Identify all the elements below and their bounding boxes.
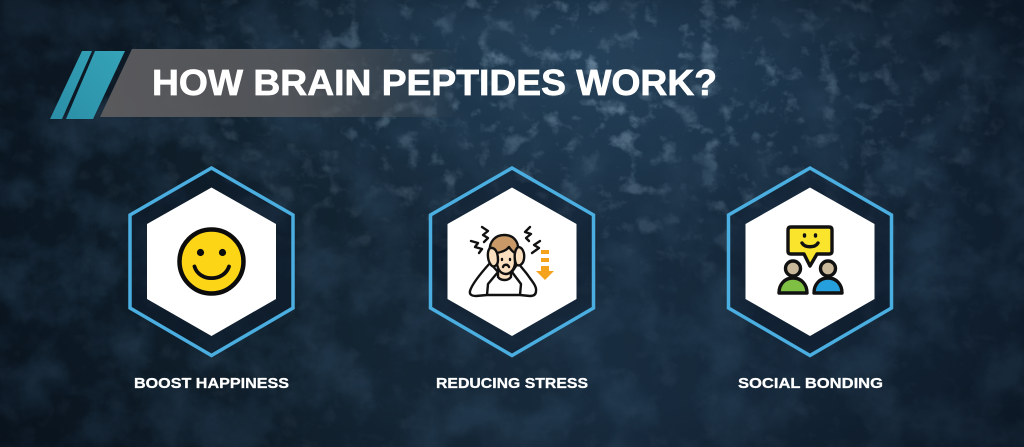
speech bubble [788, 227, 832, 266]
hand left [488, 248, 498, 266]
title: HOW BRAIN PEPTIDES WORK? [152, 62, 717, 103]
panel: boost happiness [130, 168, 293, 392]
label: SOCIAL BONDING [738, 375, 883, 392]
hexagon outline [430, 168, 594, 356]
bubble eyes [804, 235, 816, 236]
arms and torso [470, 263, 536, 296]
icon: stressed person [470, 227, 540, 296]
hair [490, 235, 518, 254]
person left head [786, 261, 800, 276]
icon: two people with speech bubble [779, 227, 842, 293]
panel: social bonding [728, 168, 892, 392]
hexagon outline [130, 168, 293, 356]
icon: smiley face [180, 230, 244, 294]
bubble smile [802, 243, 818, 247]
label: REDUCING STRESS [436, 375, 588, 392]
person right body [814, 278, 842, 293]
face [497, 247, 515, 274]
accent slash: thin [50, 51, 92, 119]
neck [498, 270, 511, 280]
person right head [820, 261, 836, 276]
person left body [779, 278, 807, 293]
icon: down arrow [536, 250, 554, 280]
panel: reducing stress [430, 168, 594, 392]
eyes and mouth [502, 259, 510, 267]
lightning right [525, 227, 540, 253]
hexagon outline [728, 168, 892, 356]
banner fade strip [100, 49, 465, 117]
title banner [50, 49, 717, 119]
hand right [515, 247, 524, 265]
label: BOOST HAPPINESS [134, 375, 289, 392]
hexagon white [147, 188, 276, 336]
accent slash: wide [66, 51, 125, 119]
hexagon white [746, 188, 874, 336]
hexagon white [448, 188, 576, 336]
lightning left [471, 227, 488, 253]
